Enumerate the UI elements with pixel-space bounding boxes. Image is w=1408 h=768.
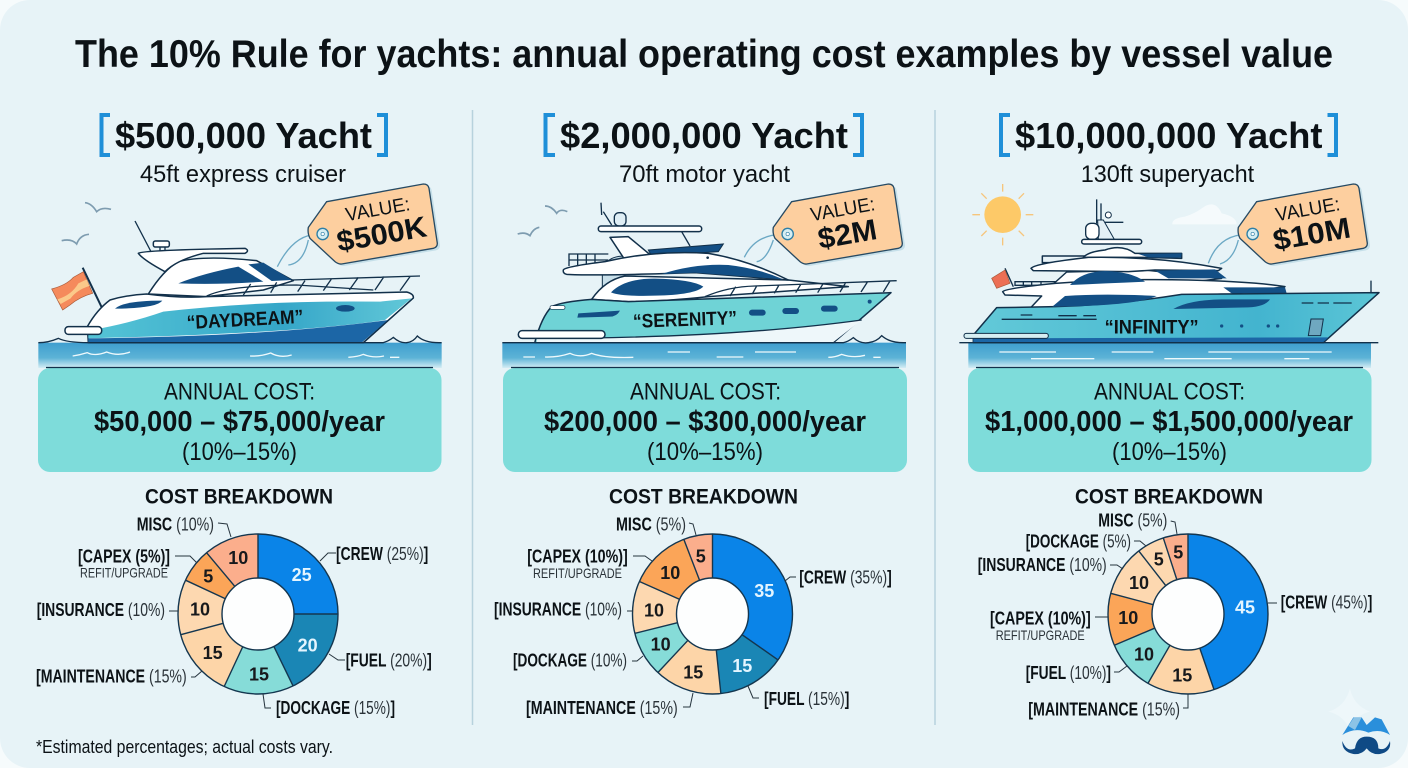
donut chart: 5: [1173, 542, 1183, 562]
illustration: express cruiser: [38, 184, 442, 368]
illustration: superyacht: $10M: [1270, 211, 1353, 258]
donut chart: [DOCKAGE (5%): [1026, 532, 1131, 552]
donut chart: [INSURANCE (10%): [494, 600, 622, 620]
annual cost box: $50,000 – $75,000/year: [94, 406, 385, 438]
donut chart: MISC (5%): [616, 515, 686, 535]
donut chart: MISC (10%): [137, 515, 214, 535]
panel: $10,000,000 yacht: [959, 115, 1379, 720]
donut chart: 15: [683, 662, 703, 682]
illustration: express cruiser: VALUE:: [344, 194, 412, 226]
donut chart: [MAINTENANCE (15%): [526, 698, 678, 718]
cost breakdown heading: COST BREAKDOWN: [609, 484, 798, 508]
donut chart: 15: [203, 643, 223, 663]
donut chart: 10: [190, 600, 210, 620]
donut chart: 10: [1118, 608, 1138, 628]
annual cost box: [38, 368, 442, 472]
illustration: motor yacht: “SERENITY”: [633, 308, 737, 333]
donut chart: [DOCKAGE (10%): [513, 651, 627, 671]
annual cost box: ANNUAL COST:: [630, 378, 781, 406]
donut chart: [FUEL (20%)]: [346, 651, 432, 671]
donut chart: [MAINTENANCE (15%): [1028, 700, 1180, 720]
heading: $10,000,000 Yacht: $10,000,000 Yacht: [1015, 115, 1322, 156]
donut chart: MISC (5%): [1098, 511, 1167, 531]
donut chart: [INSURANCE (10%): [37, 600, 165, 620]
panel: $500,000 yacht: [36, 115, 442, 718]
donut chart: 5: [1154, 550, 1164, 570]
annual cost box: ANNUAL COST:: [1094, 378, 1245, 406]
annual cost box: $1,000,000 – $1,500,000/year: [985, 406, 1353, 438]
donut chart: 20: [298, 636, 318, 656]
donut chart: [CREW (35%)]: [799, 567, 892, 587]
donut chart: 45: [1235, 598, 1255, 618]
annual cost box: (10%–15%): [1112, 438, 1227, 466]
cost breakdown heading: COST BREAKDOWN: [1075, 484, 1263, 508]
donut chart: 10: [228, 548, 248, 568]
donut chart: [DOCKAGE (15%)]: [276, 698, 395, 718]
donut chart: 15: [732, 656, 752, 676]
donut chart: REFIT/UPGRADE: [996, 627, 1085, 643]
illustration: express cruiser: “DAYDREAM”: [186, 307, 304, 334]
annual cost box: [503, 368, 907, 472]
donut chart: REFIT/UPGRADE: [80, 565, 168, 581]
heading: $2,000,000 Yacht: $2,000,000 Yacht: [560, 115, 848, 156]
heading: $500,000 Yacht: $500,000 Yacht: [115, 115, 372, 156]
icon: brand logo: [1328, 688, 1390, 754]
donut chart: [CAPEX (10%)]: [527, 547, 628, 567]
annual cost box: $200,000 – $300,000/year: [544, 406, 866, 438]
illustration: superyacht: VALUE:: [1274, 194, 1342, 226]
donut chart: 15: [1172, 666, 1192, 686]
donut chart: [CAPEX (10%)]: [990, 608, 1091, 628]
cost breakdown heading: COST BREAKDOWN: [145, 484, 333, 508]
subtitle: 70ft motor yacht: 70ft motor yacht: [619, 161, 790, 188]
donut chart: [FUEL (10%)]: [1026, 663, 1111, 683]
donut chart: 35: [754, 581, 774, 601]
donut chart: 10: [644, 600, 664, 620]
subtitle: 130ft superyacht: 130ft superyacht: [1081, 161, 1255, 188]
annual cost box: ANNUAL COST:: [164, 378, 315, 406]
illustration: express cruiser: $500K: [334, 210, 429, 259]
donut chart: [MAINTENANCE (15%): [36, 667, 187, 687]
donut chart: 10: [660, 563, 680, 583]
donut chart: 15: [249, 664, 269, 684]
donut chart: [494, 515, 892, 718]
panel: $2,000,000 yacht: [494, 115, 907, 718]
donut chart: [CREW (45%)]: [1281, 592, 1372, 612]
donut chart: [FUEL (15%)]: [764, 689, 849, 709]
donut chart: 5: [203, 566, 213, 586]
donut chart: 5: [696, 546, 706, 566]
donut chart: [36, 515, 432, 718]
illustration: motor yacht: [502, 184, 906, 368]
illustration: superyacht: “INFINITY”: [1105, 317, 1199, 338]
donut chart: [INSURANCE (10%): [978, 555, 1107, 575]
annual cost box: [968, 368, 1372, 472]
donut chart: REFIT/UPGRADE: [533, 565, 622, 581]
donut chart: [CREW (25%)]: [336, 544, 428, 564]
donut chart: 10: [1129, 573, 1149, 593]
illustration: motor yacht: VALUE:: [809, 194, 877, 226]
donut chart: 10: [651, 634, 671, 654]
illustration: superyacht: [959, 184, 1379, 368]
donut chart: [CAPEX (5%)]: [78, 547, 170, 567]
donut chart: 25: [292, 565, 312, 585]
title: The 10% Rule for yachts: annual operating cost examples by vessel value: [75, 33, 1333, 76]
donut chart: [978, 511, 1372, 720]
annual cost box: (10%–15%): [182, 438, 297, 466]
subtitle: 45ft express cruiser: 45ft express cruiser: [140, 161, 346, 188]
footnote: *Estimated percentages; actual costs vary.: [36, 736, 333, 757]
illustration: motor yacht: $2M: [815, 213, 879, 256]
annual cost box: (10%–15%): [647, 438, 763, 466]
donut chart: 10: [1134, 644, 1154, 664]
